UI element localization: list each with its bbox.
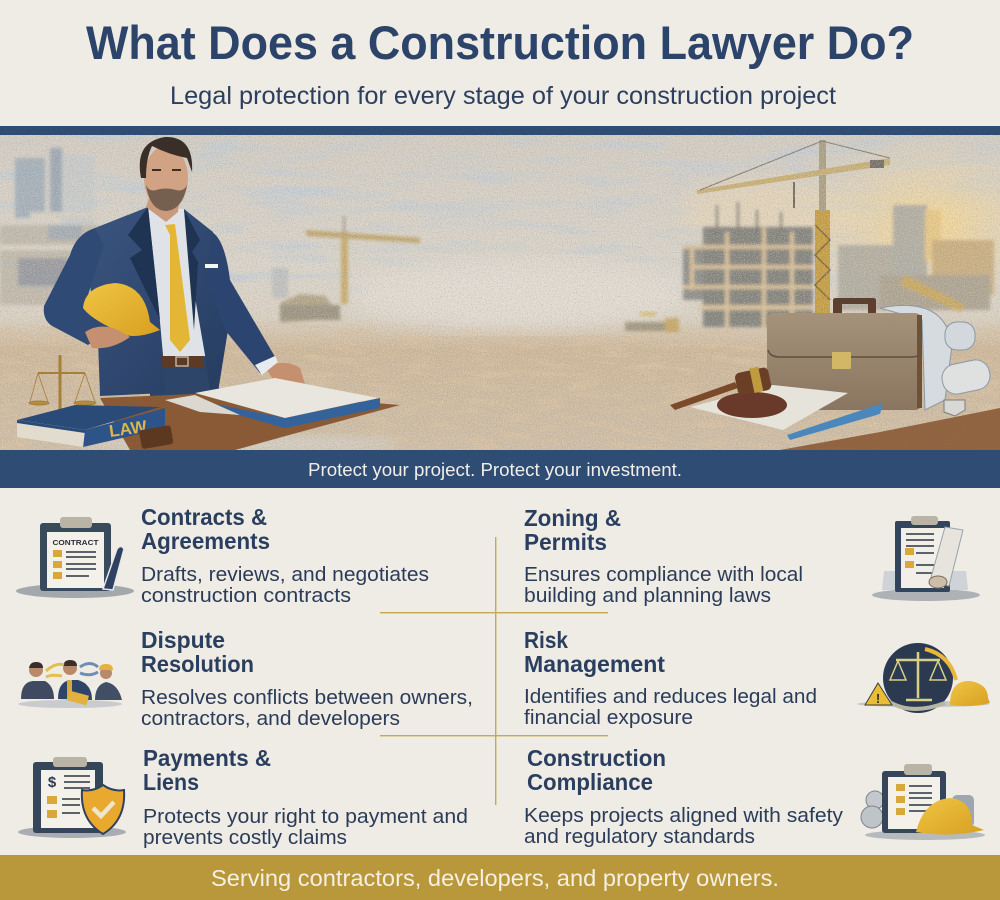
grain overlay xyxy=(0,135,1000,450)
panel: contracts and agreements: construction contracts xyxy=(141,585,351,607)
heading: Construction xyxy=(527,745,666,771)
law book: LAW xyxy=(108,417,149,441)
icon: contract clipboard: CONTRACT xyxy=(52,538,99,547)
pocket square xyxy=(205,264,218,268)
panel: risk management xyxy=(524,627,990,729)
trousers xyxy=(150,355,222,400)
neck xyxy=(146,195,180,222)
bulldozer xyxy=(625,312,679,332)
blueprint rolls xyxy=(880,305,993,410)
heading: Zoning & xyxy=(524,505,621,531)
panel: construction compliance: Compliance xyxy=(527,769,653,795)
jacket body xyxy=(85,207,228,396)
panel: payments and liens xyxy=(18,745,468,849)
footer band xyxy=(0,855,1000,900)
panel: dispute resolution: Resolution xyxy=(141,651,254,677)
footer band: Serving contractors, developers, and property owners. xyxy=(211,865,779,891)
hard hat xyxy=(83,283,160,336)
hero top rule xyxy=(0,126,1000,135)
heading: Risk xyxy=(524,627,568,653)
left hand xyxy=(85,326,130,348)
right hand xyxy=(265,363,307,390)
tagline band: Protect your project. Protect your investment. xyxy=(308,460,682,480)
tagline band xyxy=(0,450,1000,488)
clouds xyxy=(0,135,1000,295)
hair xyxy=(140,137,192,178)
grid dividers xyxy=(380,537,608,805)
panel: dispute resolution: contractors, and developers xyxy=(141,708,400,730)
desk gavel xyxy=(139,417,244,449)
icon: payment clipboard with shield xyxy=(18,757,126,838)
documents under gavel xyxy=(690,385,883,440)
shirt cuff xyxy=(255,356,278,375)
scales of justice xyxy=(29,355,96,419)
icon: scales with warning and hard hat xyxy=(857,643,990,713)
panel: construction compliance: and regulatory standards xyxy=(524,826,755,848)
description: Resolves conflicts between owners, xyxy=(141,687,473,709)
description: Identifies and reduces legal and xyxy=(524,686,817,708)
panel: contracts and agreements xyxy=(16,504,429,607)
left crane and distant site xyxy=(272,216,420,323)
icon: three people negotiating xyxy=(18,660,122,708)
icon: scales with warning and hard hat: ! xyxy=(876,691,880,706)
icon: compliance clipboard with hard hat xyxy=(861,764,985,840)
man: lawyer xyxy=(44,137,307,400)
heading: Contracts & xyxy=(141,504,267,530)
right city xyxy=(838,205,994,312)
panel: risk management: financial exposure xyxy=(524,707,693,729)
tie xyxy=(165,224,190,352)
panel: contracts and agreements: Agreements xyxy=(141,528,270,554)
description: Drafts, reviews, and negotiates xyxy=(141,564,429,586)
right desk xyxy=(780,408,1000,450)
panel: payments and liens: Liens xyxy=(143,769,199,795)
right arm xyxy=(207,232,278,373)
hero illustration xyxy=(0,135,1000,453)
law book xyxy=(17,405,165,447)
goggles xyxy=(944,400,965,416)
tower crane xyxy=(697,140,890,315)
sky and ground backdrop xyxy=(0,135,1000,450)
subtitle: Legal protection for every stage of your construction project xyxy=(170,82,836,110)
beard xyxy=(146,185,187,211)
description: Ensures compliance with local xyxy=(524,564,803,586)
panel: dispute resolution xyxy=(18,627,473,730)
contract papers xyxy=(165,378,380,428)
belt xyxy=(162,356,204,367)
icon: contract clipboard xyxy=(16,517,134,598)
desk xyxy=(100,392,400,450)
description: Keeps projects aligned with safety xyxy=(524,805,843,827)
description: Protects your right to payment and xyxy=(143,806,468,828)
panel: zoning and permits: building and planning laws xyxy=(524,585,771,607)
eyes xyxy=(152,169,181,171)
sunset glow xyxy=(800,140,1000,310)
lapels xyxy=(128,207,200,330)
panel: payments and liens: prevents costly claims xyxy=(143,827,347,849)
panel: risk management: Management xyxy=(524,651,665,677)
construction frame building xyxy=(683,202,813,328)
panel: zoning and permits: Permits xyxy=(524,529,607,555)
ground xyxy=(0,325,1000,450)
left arm xyxy=(44,228,110,345)
gavel and sound block xyxy=(670,367,787,418)
heading: Payments & xyxy=(143,745,271,771)
shirt xyxy=(148,207,207,358)
face xyxy=(144,146,188,210)
icon: permit clipboard with roll xyxy=(872,516,980,601)
title: What Does a Construction Lawyer Do? xyxy=(86,16,914,69)
left buildings xyxy=(0,148,102,305)
briefcase xyxy=(767,298,922,410)
haze centre xyxy=(350,261,690,329)
icon: payment clipboard with shield: $ xyxy=(48,774,57,791)
panel: zoning and permits xyxy=(524,505,980,607)
panel: construction compliance xyxy=(524,745,985,848)
heading: Dispute xyxy=(141,627,225,653)
